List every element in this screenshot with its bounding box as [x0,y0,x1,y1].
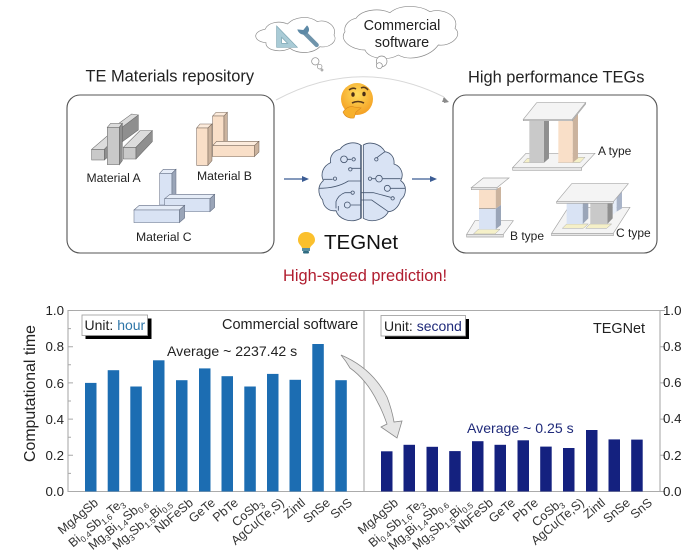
x labels: TEGNet: Te [404,499,423,518]
x labels: TEGNet: Bi [366,532,383,550]
x labels: TEGNet: 1.5 [442,515,458,530]
x labels: commercial software: Sb [120,503,141,524]
x labels: TEGNet: Sb [383,515,404,535]
x labels: TEGNet: Bi [403,521,420,538]
x labels: commercial software: 1.6 [99,512,115,527]
x labels: commercial software: 3 [118,500,128,511]
x labels: commercial software: Te [104,499,123,518]
x labels: commercial software: PbTe [210,496,241,525]
left y axis labels: 0.0 [46,484,64,499]
chart frame [68,310,660,492]
x labels: commercial software: Bi [103,521,120,538]
x labels: commercial software: 3 [257,500,267,511]
label: B type: B type [510,229,544,243]
left y axis labels: 0.6 [46,376,64,391]
icon: C type device [552,184,630,236]
x labels: TEGNet: 0.4 [378,529,394,544]
x labels: TEGNet: 1.6 [399,512,415,527]
heading: High performance TEGs: High performance TEGs [468,68,644,86]
right y axis labels: 0.4 [663,411,682,426]
bars: commercial software [85,344,347,492]
x labels: commercial software: Bi [66,532,83,550]
label: Material C: Material C [136,230,192,244]
cloud label: Commercial [364,18,440,34]
arrow: TEGNet to TEGs [412,176,437,182]
left y axis labels: 1.0 [46,303,64,318]
icon: set square [277,26,297,47]
x labels: TEGNet: CoSb [529,499,562,529]
cloud: tools [256,17,335,71]
panel: materials repository [67,95,274,253]
right y axis labels: 0.2 [663,448,682,463]
x labels: TEGNet: Zintl [581,496,608,521]
x labels: TEGNet: PbTe [510,496,541,525]
label: Material A: Material A [86,171,142,185]
x labels: commercial software: MgAgSb [55,496,101,537]
cloud label: software [375,35,429,51]
x labels: commercial software: 1.4 [115,517,131,533]
x labels: commercial software: NbFeSb [152,496,196,536]
left y axis labels: 0.2 [46,448,64,463]
x labels: TEGNet: 0.5 [460,500,475,515]
x labels: commercial software: 1.5 [142,515,158,530]
icon: Material C [134,169,215,223]
icon: brain [319,143,405,221]
icon: B type device [467,178,513,237]
right y axis labels: 0.0 [663,484,682,499]
x labels: TEGNet: 3 [557,500,567,511]
label: A type: A type [598,144,632,158]
right y axis labels: 0.8 [663,339,682,354]
right y axis labels [663,303,682,499]
x labels: TEGNet: 1.4 [415,517,431,533]
x labels: TEGNet: Bi [447,503,465,521]
x labels: commercial software: SnS [328,496,355,521]
average: commercial software: Average ~ 2237.42 s [167,343,297,359]
x labels: commercial software: 0.6 [136,500,151,515]
x labels: commercial software: GeTe [186,496,218,526]
label: C type: C type [616,226,651,240]
x labels: TEGNet: Mg [410,531,432,553]
arrow: repository to TEGNet [284,176,309,182]
x labels: TEGNet: 3 [427,532,437,543]
x labels: TEGNet: AgCu(Te,S) [528,496,587,548]
x labels: commercial software: 3 [127,532,137,543]
x labels: TEGNet [355,495,655,554]
x labels: commercial software: CoSb [229,499,262,529]
cloud: commercial software [343,6,458,69]
unit box: hour [82,315,152,339]
x labels: commercial software: Zintl [281,496,308,521]
arrow: commercial to TEGNet [341,355,402,438]
x labels: TEGNet: SnS [628,496,655,521]
right y axis labels: 0.6 [663,375,682,390]
x labels: commercial software: AgCu(Te,S) [228,496,287,548]
callout: high-speed prediction: High-speed prediction! [283,267,447,285]
x labels: commercial software: 0.5 [160,500,175,515]
x labels: TEGNet: Sb [420,503,441,524]
chart title: commercial software: Commercial software [222,317,358,333]
x labels: commercial software: Bi [147,503,165,521]
x labels: commercial software: Sb [83,515,104,535]
x labels: commercial software [55,495,355,554]
icon: wrench [297,25,317,45]
arrow: curved direct path [276,77,449,103]
x labels: commercial software: Sb [127,518,147,538]
right y axis labels: 1.0 [663,303,682,318]
left y axis labels: 0.8 [46,339,64,354]
x labels: TEGNet: 3 [403,532,413,543]
x labels: TEGNet: 0.6 [436,500,451,515]
chart title: TEGNet: TEGNet [593,321,645,337]
average: TEGNet: Average ~ 0.25 s [467,420,574,436]
x labels: TEGNet: SnSe [600,496,633,526]
x labels: TEGNet: GeTe [486,496,518,526]
icon: Material A [92,114,152,165]
icon: Material B [197,112,259,165]
x labels: commercial software: Mg [86,531,108,553]
bars: TEGNet [381,430,643,492]
thought clouds [256,6,458,71]
x labels: TEGNet: Mg [386,531,408,553]
x labels: commercial software: 3 [103,532,113,543]
panel: high performance TEGs [453,95,657,253]
x labels: TEGNet: Sb [427,518,447,538]
chart: computational time [22,303,682,554]
left y axis labels [46,303,64,499]
x labels: TEGNet: 3 [418,500,428,511]
icon: light bulb [298,232,315,254]
icon: thinking face [341,83,373,118]
unit box: second [381,316,469,339]
x labels: commercial software: 0.4 [78,529,94,544]
x labels: TEGNet: MgAgSb [355,496,401,537]
unit box: hour: Unit: hour [84,317,146,333]
x labels: commercial software: Mg [110,531,132,553]
label: TEGNet: TEGNet [324,231,398,254]
y axis title: Computational time [22,325,39,462]
x labels: commercial software: SnSe [300,496,333,526]
x labels: TEGNet: NbFeSb [452,496,496,536]
label: Material B: Material B [197,169,252,183]
unit box: second: Unit: second [384,318,462,334]
left y axis labels: 0.4 [46,412,64,427]
heading: TE Materials repository: TE Materials repository [86,68,255,86]
icon: A type device [513,103,595,170]
